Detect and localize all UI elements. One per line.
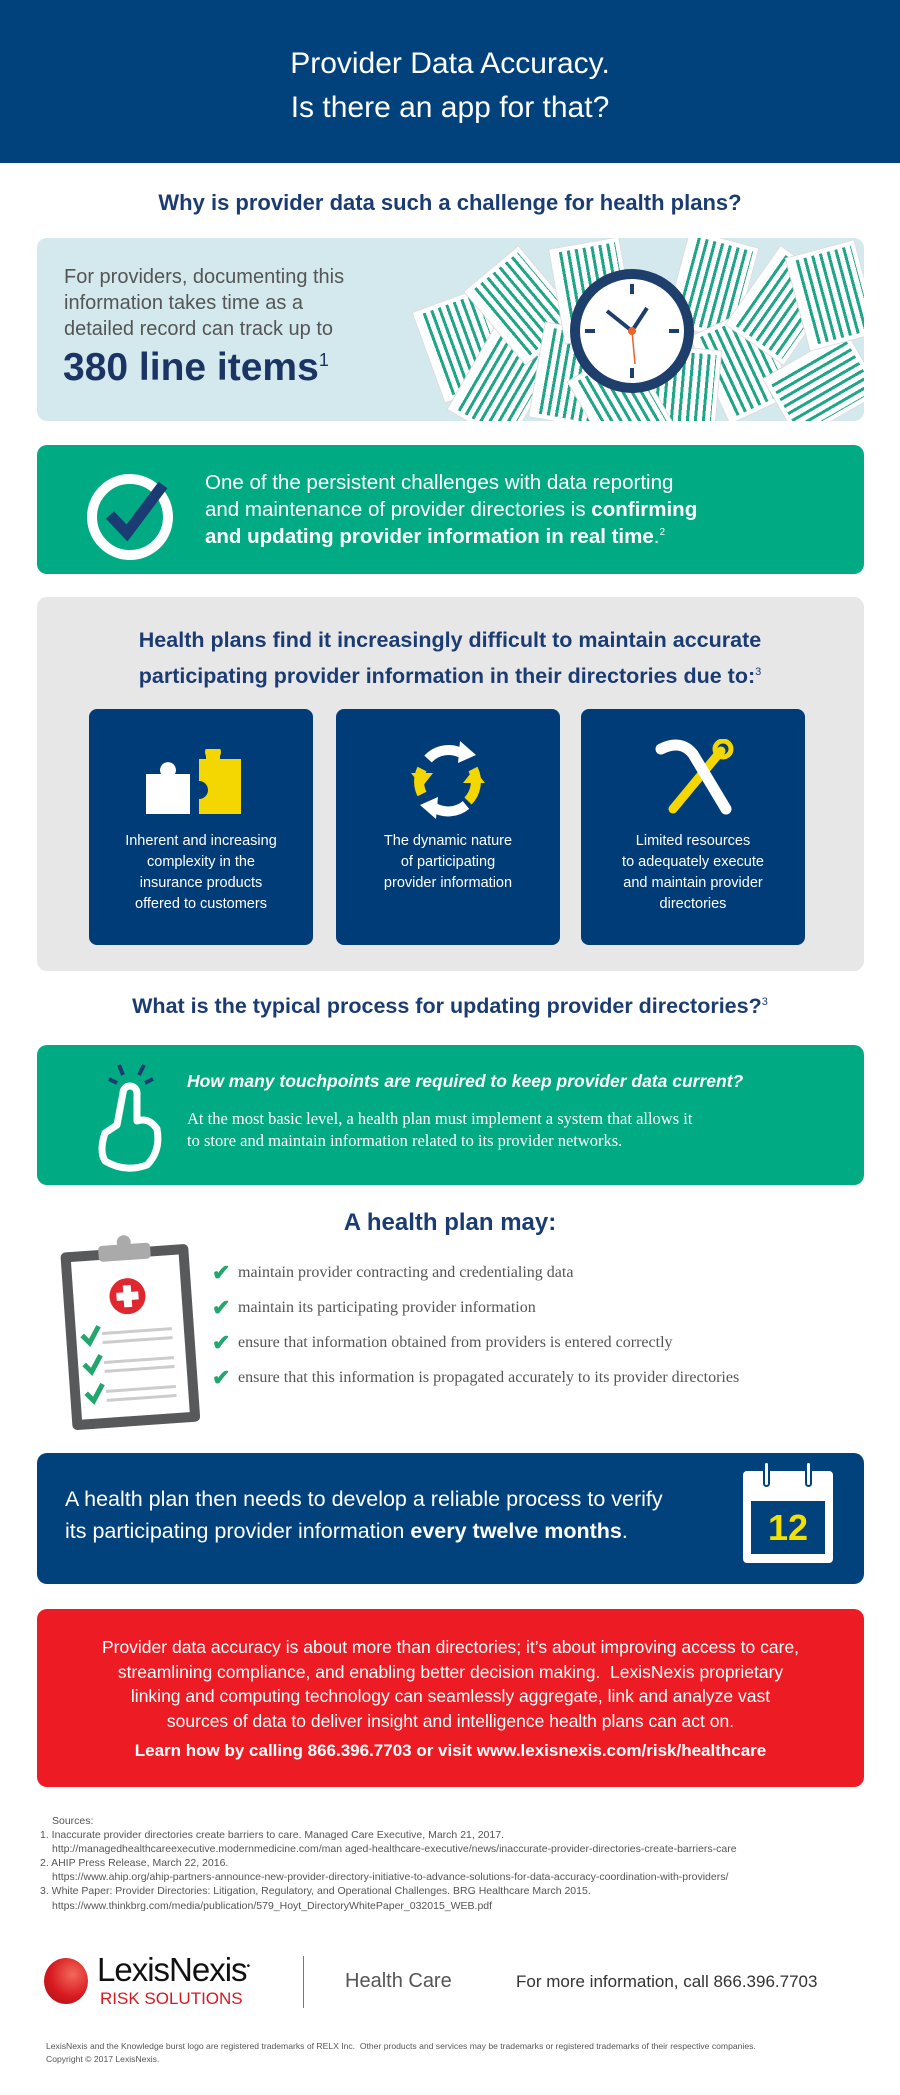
card: complexity: insurance products <box>140 875 262 891</box>
list: health plan tasks: ensure that information obtained from providers is entered correctly <box>238 1334 673 1351</box>
stat: 380 line items: 380 line items1 <box>63 346 329 389</box>
icon: calendar 12: 12 <box>768 1507 808 1548</box>
list: health plan tasks: ensure that this information is propagated accurately to its provider directories <box>238 1369 739 1386</box>
card: limited resources: and maintain provider <box>623 875 763 891</box>
papers and clock illustration <box>412 238 864 421</box>
trademark <box>46 2041 756 2064</box>
card: dynamic <box>336 709 560 945</box>
text: Health Care: Health Care <box>345 1970 452 1992</box>
card: complexity <box>89 709 313 945</box>
card: limited resources: Limited resources <box>636 833 750 849</box>
sources: http://managedhealthcareexecutive.modernmedicine.com/man aged-healthcare-executive/news/inaccurate-provider-directories-create-barriers-care <box>52 1843 737 1855</box>
text: body <box>187 1109 692 1150</box>
text: and updating provider information in real time.2 <box>205 525 665 548</box>
header <box>0 0 900 163</box>
text: and maintenance of provider directories is confirming <box>205 498 697 521</box>
sources: https://www.thinkbrg.com/media/publication/579_Hoyt_DirectoryWhitePaper_032015_WEB.pdf <box>52 1900 492 1912</box>
panel: 380 line items <box>37 238 864 421</box>
icon: check clock <box>87 474 173 560</box>
card: complexity: complexity in the <box>147 854 255 870</box>
list: health plan tasks: ✔ <box>212 1260 230 1285</box>
heading: difficulties: Health plans find it increasingly difficult to maintain accurate <box>139 628 761 652</box>
icon: clipboard <box>60 1235 200 1430</box>
card: dynamic: The dynamic nature <box>384 833 512 849</box>
text <box>65 1487 663 1543</box>
text: question: How many touchpoints are required to keep provider data current? <box>187 1071 743 1091</box>
sources: Sources: <box>52 1815 93 1827</box>
logo: LexisNexis: LexisNexis• <box>97 1951 249 1988</box>
trademark: LexisNexis and the Knowledge burst logo are registered trademarks of RELX Inc. Other products and services may be trademarks or registered trademarks of their respective companies. <box>46 2041 756 2051</box>
text: contact: Learn how by calling 866.396.7703 or visit www.lexisnexis.com/risk/healthcare <box>135 1741 766 1760</box>
trademark: Copyright © 2017 LexisNexis. <box>46 2054 159 2064</box>
panel: every twelve months <box>37 1453 864 1584</box>
card: complexity: offered to customers <box>135 896 267 912</box>
text: One of the persistent challenges with data reporting <box>205 471 673 494</box>
card: complexity: Inherent and increasing <box>125 833 277 849</box>
heading: typical process: What is the typical process for updating provider directories?3 <box>132 994 768 1018</box>
sources: 1. Inaccurate provider directories create barriers to care. Managed Care Executive, March 21, 2017. <box>40 1829 504 1841</box>
heading: a health plan may: A health plan may: <box>344 1209 556 1236</box>
text: body: sources of data to deliver insight and intelligence health plans can act on. <box>167 1710 734 1730</box>
divider <box>303 1956 304 2008</box>
heading: difficulties: participating provider information in their directories due to:3 <box>139 664 761 688</box>
list: health plan tasks: ✔ <box>212 1295 230 1320</box>
sources: 2. AHIP Press Release, March 22, 2016. <box>40 1857 228 1869</box>
sources: https://www.ahip.org/ahip-partners-announce-new-provider-directory-initiative-to-advance-solutions-for-data-accuracy-coordination-with-providers/ <box>52 1871 728 1883</box>
card: limited resources <box>581 709 805 945</box>
text: more information: For more information, call 866.396.7703 <box>516 1972 817 1991</box>
icon: tapping hand <box>98 1064 162 1172</box>
icon: knowledge burst <box>44 1958 88 2004</box>
icon: calendar 12 <box>743 1471 833 1563</box>
text: documenting: information takes time as a <box>64 292 303 314</box>
list: health plan tasks: maintain its participating provider information <box>238 1299 536 1316</box>
text: body <box>102 1637 799 1730</box>
text: documenting: detailed record can track up to <box>64 318 333 340</box>
text <box>205 471 697 548</box>
text: body: to store and maintain information related to its provider networks. <box>187 1131 622 1150</box>
sources <box>40 1815 737 1912</box>
list: health plan tasks: ✔ <box>212 1330 230 1355</box>
icon: clock <box>570 269 694 393</box>
text: its participating provider information every twelve months. <box>65 1519 628 1543</box>
list: health plan tasks <box>212 1260 739 1390</box>
header: Is there an app for that? <box>291 91 609 124</box>
text: body: streamlining compliance, and enabling better decision making. LexisNexis proprietary <box>118 1662 783 1682</box>
panel: real time <box>37 445 864 574</box>
heading: difficulties <box>139 628 761 688</box>
card: limited resources: to adequately execute <box>622 854 764 870</box>
text: body: Provider data accuracy is about more than directories; it’s about improving access to care, <box>102 1637 799 1657</box>
text: body: At the most basic level, a health plan must implement a system that allows it <box>187 1109 692 1128</box>
text: body: linking and computing technology can seamlessly aggregate, link and analyze vast <box>131 1686 770 1706</box>
heading: why challenge: Why is provider data such a challenge for health plans? <box>158 190 742 215</box>
text: A health plan then needs to develop a reliable process to verify <box>65 1487 663 1511</box>
icon: cycle arrows <box>411 741 485 819</box>
card: limited resources: directories <box>660 896 726 912</box>
icon: tools <box>656 739 734 814</box>
panel: call to action <box>37 1609 864 1787</box>
icon: puzzle <box>146 749 241 814</box>
text: documenting <box>64 266 344 340</box>
sources: 3. White Paper: Provider Directories: Litigation, Regulatory, and Operational Challenges. BRG Healthcare March 2015. <box>40 1885 591 1897</box>
panel: touchpoints <box>37 1045 864 1185</box>
panel: difficulties <box>37 597 864 971</box>
list: health plan tasks: ✔ <box>212 1365 230 1390</box>
logo: LexisNexis <box>44 1951 250 2008</box>
logo: LexisNexis: RISK SOLUTIONS <box>100 1989 243 2008</box>
header: Provider Data Accuracy. <box>290 47 610 80</box>
card: dynamic: of participating <box>401 854 495 870</box>
card: dynamic: provider information <box>384 875 512 891</box>
text: documenting: For providers, documenting this <box>64 266 344 288</box>
list: health plan tasks: maintain provider contracting and credentialing data <box>238 1264 573 1281</box>
